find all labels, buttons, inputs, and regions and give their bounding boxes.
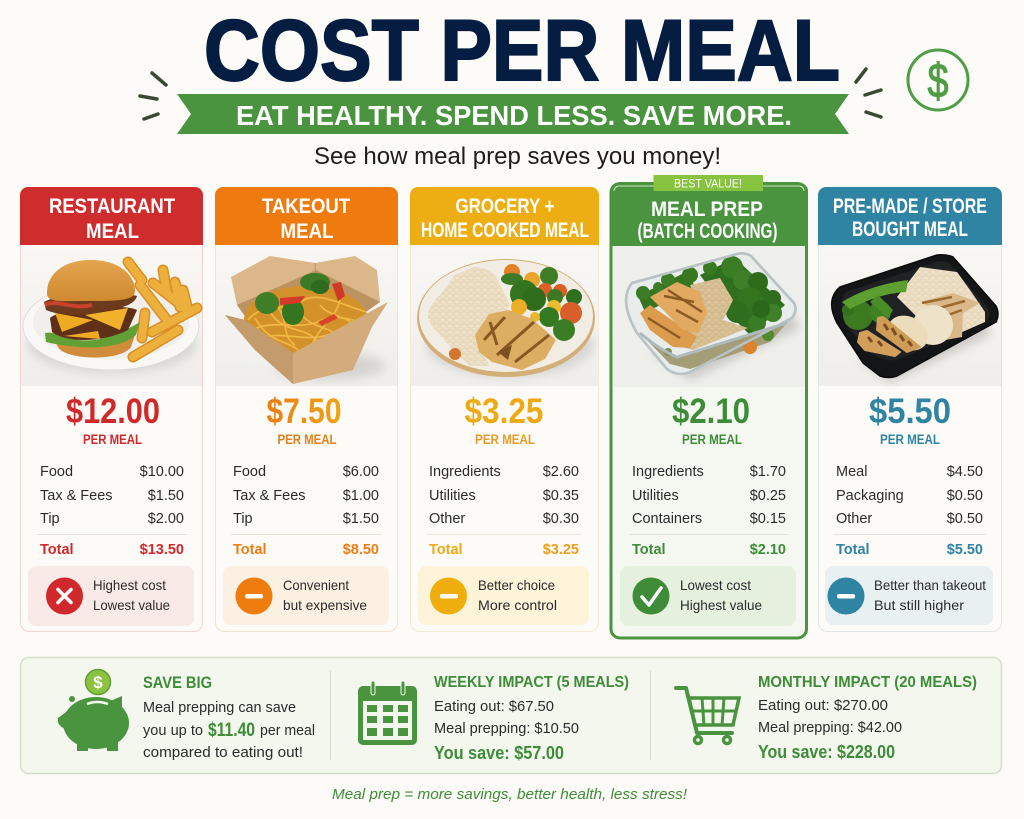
panel: savings summary [20, 658, 1002, 774]
verdict: Better than takeout [874, 577, 986, 593]
cost rows: Tip [40, 511, 60, 527]
panel: grocery home cooked meal [410, 187, 599, 632]
cost rows: $2.60 [543, 464, 579, 480]
text block: monthly impact: Eating out: $270.00 [758, 697, 888, 714]
heading [410, 187, 599, 245]
verdict: Highest cost [93, 577, 166, 593]
title: COST PER MEAL [204, 3, 840, 99]
heading: TAKEOUT [262, 195, 350, 218]
cost rows: $1.50 [148, 488, 184, 504]
text block: weekly impact: WEEKLY IMPACT (5 MEALS) [434, 674, 629, 691]
subtitle: See how meal prep saves you money! [314, 143, 721, 170]
cost rows [231, 464, 382, 558]
cost rows: $0.15 [750, 511, 786, 527]
icon: calendar [358, 681, 417, 745]
cost rows: Tax & Fees [40, 488, 113, 504]
cost rows: Ingredients [429, 464, 501, 480]
heading: MEAL [86, 220, 139, 243]
cost rows: $0.35 [543, 488, 579, 504]
verdict: Better choice [478, 577, 555, 593]
text block: save big: you up to [143, 722, 203, 739]
cost rows: $13.50 [140, 542, 184, 558]
icon: dollar circle: $ [928, 55, 948, 108]
price: $5.50 [869, 392, 951, 431]
cost rows: $10.00 [140, 464, 184, 480]
text block: weekly impact [434, 674, 629, 763]
cost rows [629, 464, 788, 558]
cost rows: $1.70 [750, 464, 786, 480]
heading [610, 183, 808, 246]
panel: restaurant meal [20, 187, 203, 632]
verdict: Lowest cost [680, 577, 751, 593]
cost rows: $0.30 [543, 511, 579, 527]
cost rows: Utilities [429, 488, 476, 504]
price: $7.50 [266, 392, 342, 431]
price: $2.10 [672, 392, 750, 431]
heading: GROCERY + [456, 195, 554, 218]
cost rows: Other [836, 511, 872, 527]
cost rows: $0.25 [750, 488, 786, 504]
photo: burger and fries [21, 246, 202, 386]
verdict [620, 566, 796, 626]
banner text: EAT HEALTHY. SPEND LESS. SAVE MORE. [236, 100, 792, 131]
icon: piggy bank with coin: $ [93, 673, 103, 692]
verdict [418, 566, 589, 625]
icon: dollar circle [908, 50, 968, 110]
cost rows: $0.50 [947, 488, 983, 504]
cost rows: Utilities [632, 488, 679, 504]
cost rows: Total [429, 542, 463, 558]
cost rows: Food [40, 464, 73, 480]
text block: weekly impact: Eating out: $67.50 [434, 698, 554, 715]
per meal label: PER MEAL [880, 432, 940, 447]
price: $12.00 [66, 392, 160, 431]
heading: HOME COOKED MEAL [421, 219, 589, 242]
verdict [825, 566, 993, 625]
text block: save big: $11.40 [208, 720, 255, 741]
cost rows: Meal [836, 464, 867, 480]
text block: save big: SAVE BIG [143, 673, 212, 692]
text block: weekly impact: You save: $57.00 [434, 743, 564, 763]
verdict [28, 566, 194, 626]
verdict: Convenient [283, 577, 349, 593]
cost rows: Tip [233, 511, 253, 527]
text block: monthly impact [758, 674, 977, 762]
verdict [223, 566, 389, 625]
heading: MEAL PREP [651, 198, 763, 221]
cost rows: Total [632, 542, 666, 558]
cost rows: Containers [632, 511, 702, 527]
verdict: Lowest value [93, 597, 170, 613]
heading [818, 187, 1002, 245]
text block: monthly impact: You save: $228.00 [758, 742, 895, 762]
text block: save big: Meal prepping can save [143, 699, 296, 716]
heading [215, 187, 398, 245]
heading [20, 187, 203, 245]
icon: shopping cart [676, 688, 739, 744]
photo: plate with rice, chicken and vegetables [411, 246, 598, 386]
cost rows [833, 464, 986, 558]
cost rows: Total [836, 542, 870, 558]
cost rows: $8.50 [343, 542, 379, 558]
cost rows: $1.00 [343, 488, 379, 504]
cost rows: $1.50 [343, 511, 379, 527]
cost rows: Other [429, 511, 465, 527]
cost rows: $0.50 [947, 511, 983, 527]
verdict: but expensive [283, 597, 367, 613]
per meal label: PER MEAL [83, 432, 142, 447]
price: $3.25 [464, 392, 544, 431]
cost rows [37, 464, 187, 558]
best value badge: BEST VALUE! [674, 176, 742, 190]
footer tagline: Meal prep = more savings, better health, less stress! [332, 786, 688, 803]
text block: save big: compared to eating out! [143, 744, 303, 761]
cost rows: $2.00 [148, 511, 184, 527]
cost rows: $4.50 [947, 464, 983, 480]
per meal label: PER MEAL [278, 432, 336, 447]
text block: save big [143, 673, 315, 761]
panel: takeout meal [215, 187, 398, 632]
panel: meal prep [610, 175, 808, 638]
cost rows [426, 464, 582, 558]
cost rows: Ingredients [632, 464, 704, 480]
banner ribbon [177, 94, 849, 134]
cost rows: $5.50 [947, 542, 983, 558]
photo: glass meal prep container [613, 246, 805, 387]
verdict: Highest value [680, 597, 762, 613]
heading: MEAL [280, 220, 334, 243]
cost rows: Packaging [836, 488, 904, 504]
text block: monthly impact: MONTHLY IMPACT (20 MEALS) [758, 674, 977, 691]
cost rows: $6.00 [343, 464, 379, 480]
text block: save big: per meal [260, 722, 315, 739]
cost rows: Total [233, 542, 267, 558]
icon: piggy bank with coin [58, 670, 129, 751]
text block: weekly impact: Meal prepping: $10.50 [434, 720, 579, 737]
verdict: But still higher [874, 597, 964, 613]
cost rows: $2.10 [750, 542, 786, 558]
cost rows: $3.25 [543, 542, 579, 558]
panel: pre-made store bought meal [818, 187, 1002, 632]
cost rows: Food [233, 464, 266, 480]
cost rows: Tax & Fees [233, 488, 306, 504]
heading: (BATCH COOKING) [638, 220, 778, 243]
per meal label: PER MEAL [682, 432, 742, 447]
decorative sparks right [856, 69, 881, 117]
text block: monthly impact: Meal prepping: $42.00 [758, 719, 902, 736]
photo: noodle takeout box [216, 246, 397, 386]
verdict: More control [478, 597, 557, 613]
heading: BOUGHT MEAL [852, 218, 968, 241]
photo: black tray meal [819, 246, 1001, 386]
best value badge [654, 175, 763, 191]
decorative sparks left [140, 73, 166, 119]
per meal label: PER MEAL [475, 432, 535, 447]
heading: RESTAURANT [49, 195, 175, 218]
cost rows: Total [40, 542, 74, 558]
